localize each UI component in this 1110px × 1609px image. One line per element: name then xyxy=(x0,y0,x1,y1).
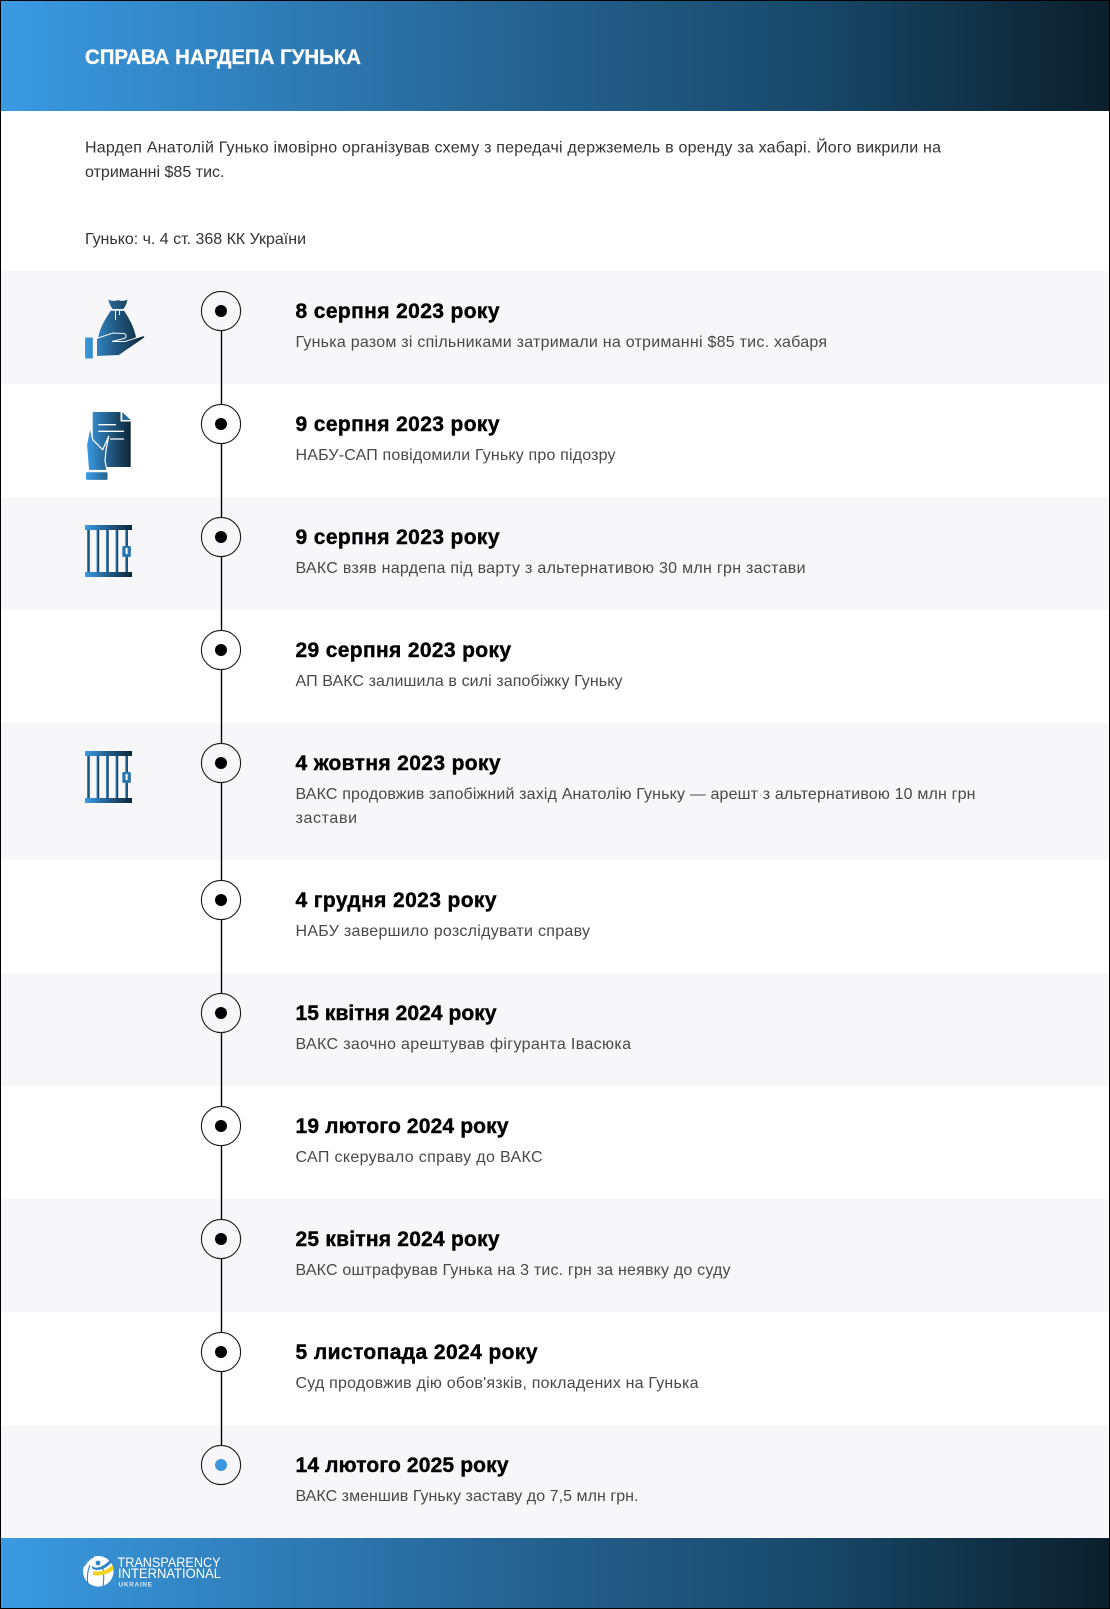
event 6 xyxy=(201,880,590,940)
timeline node xyxy=(201,517,241,557)
date: 29 серпня 2023 року xyxy=(296,639,511,662)
header banner xyxy=(0,0,1110,111)
timeline line xyxy=(221,311,222,1465)
description: ВАКС оштрафував Гунька на 3 тис. грн за неявку до суду xyxy=(296,1262,730,1279)
row background bands xyxy=(0,271,1110,1538)
description: застави xyxy=(296,810,357,827)
event 8 xyxy=(201,1106,542,1166)
icon: money bag in hand xyxy=(85,300,145,358)
description: ВАКС зменшив Гуньку заставу до 7,5 млн грн. xyxy=(296,1488,638,1505)
logo: Transparency International Ukraine: INTERNATIONAL xyxy=(118,1566,221,1581)
legal article note: Гунько: ч. 4 ст. 368 КК України xyxy=(85,231,306,248)
description: АП ВАКС залишила в силі запобіжку Гуньку xyxy=(296,673,622,690)
intro text: отриманні $85 тис. xyxy=(85,164,224,181)
date: 19 лютого 2024 року xyxy=(296,1115,509,1138)
date: 14 лютого 2025 року xyxy=(296,1454,509,1477)
timeline node xyxy=(201,1219,241,1259)
icon: document in hand xyxy=(86,412,131,480)
event 7 xyxy=(201,993,631,1053)
date: 5 листопада 2024 року xyxy=(296,1341,538,1364)
timeline node xyxy=(201,1106,241,1146)
description: Гунька разом зі спільниками затримали на отриманні $85 тис. хабаря xyxy=(296,334,827,351)
date: 9 серпня 2023 року xyxy=(296,413,500,436)
date: 8 серпня 2023 року xyxy=(296,300,500,323)
description: САП скерувало справу до ВАКС xyxy=(296,1149,542,1166)
description: Суд продовжив дію обов'язків, покладених на Гунька xyxy=(296,1375,699,1392)
timeline node xyxy=(201,880,241,920)
description: ВАКС взяв нардепа під варту з альтернативою 30 млн грн застави xyxy=(296,560,806,577)
description: НАБУ завершило розслідувати справу xyxy=(296,923,590,940)
intro text: Нардеп Анатолій Гунько імовірно організував схему з передачі держземель в оренду за хабарі. Його викрили на xyxy=(85,138,941,156)
date: 4 жовтня 2023 року xyxy=(296,752,501,775)
timeline node xyxy=(201,630,241,670)
timeline node xyxy=(201,291,241,331)
intro text xyxy=(85,138,941,181)
date: 15 квітня 2024 року xyxy=(296,1002,497,1025)
icon: prison bars xyxy=(85,525,132,577)
timeline node xyxy=(201,743,241,783)
icon: prison bars xyxy=(85,751,132,803)
timeline node xyxy=(201,1445,241,1485)
description: ВАКС продовжив запобіжний захід Анатолію Гуньку — арешт з альтернативою 10 млн грн xyxy=(296,786,976,803)
date: 9 серпня 2023 року xyxy=(296,526,500,549)
timeline node xyxy=(201,993,241,1033)
description xyxy=(296,786,976,827)
event 5 xyxy=(85,743,976,827)
date: 4 грудня 2023 року xyxy=(296,889,497,912)
event 1 xyxy=(85,291,827,358)
logo: Transparency International Ukraine xyxy=(83,1555,221,1588)
event 3 xyxy=(85,517,806,577)
timeline node xyxy=(201,404,241,444)
footer banner xyxy=(0,1538,1110,1609)
description: НАБУ-САП повідомили Гуньку про підозру xyxy=(296,447,616,464)
event 11 xyxy=(201,1445,638,1505)
date: 25 квітня 2024 року xyxy=(296,1228,500,1251)
logo: Transparency International Ukraine: UKRAINE xyxy=(118,1582,153,1588)
logo: Transparency International Ukraine: TRANSPARENCY xyxy=(118,1555,220,1570)
title: СПРАВА НАРДЕПА ГУНЬКА xyxy=(85,45,361,69)
event 4 xyxy=(201,630,622,690)
event 10 xyxy=(201,1332,699,1392)
description: ВАКС заочно арештував фігуранта Івасюка xyxy=(296,1036,631,1053)
event 2 xyxy=(86,404,616,480)
timeline node xyxy=(201,1332,241,1372)
event 9 xyxy=(201,1219,730,1279)
